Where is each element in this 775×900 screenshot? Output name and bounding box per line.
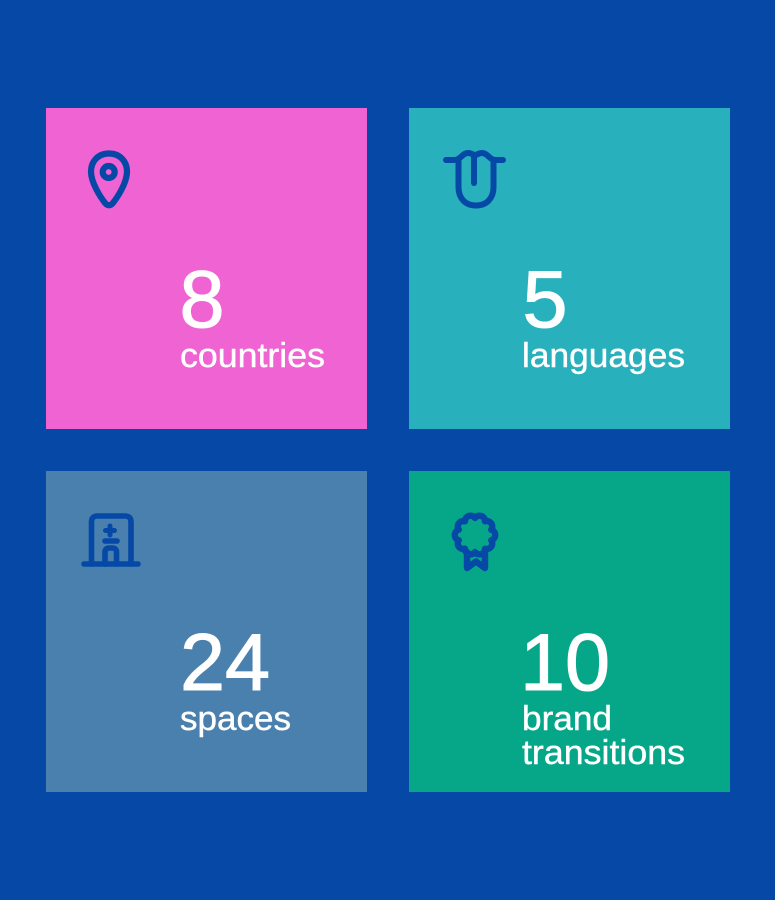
icon: tongue — [446, 153, 503, 206]
icon: map pin — [91, 154, 127, 205]
panel: spaces — [46, 471, 367, 792]
panel: countries — [46, 108, 367, 429]
label: countries: countries — [180, 337, 325, 375]
number: 8: 8 — [180, 255, 225, 345]
label: spaces: spaces — [180, 700, 291, 738]
label: brand transitions: transitions — [522, 734, 685, 772]
icon: award rosette — [455, 516, 495, 568]
panel: languages — [409, 108, 730, 429]
panel: brand transitions — [409, 471, 730, 792]
label: brand transitions: brand — [522, 700, 612, 738]
number: 10: 10 — [520, 618, 610, 708]
icon: hospital building — [84, 516, 138, 564]
number: 5: 5 — [522, 255, 568, 345]
label: languages: languages — [522, 337, 685, 375]
number: 24: 24 — [180, 618, 270, 708]
